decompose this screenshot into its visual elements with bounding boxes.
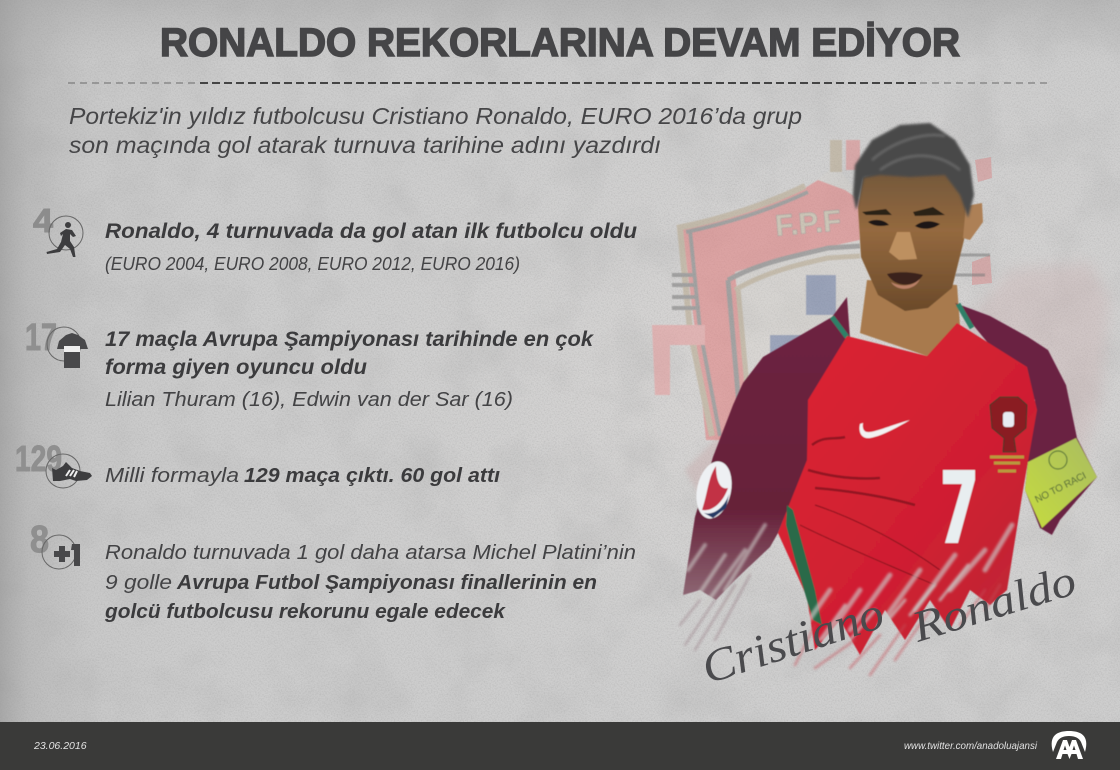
item 2 text: forma giyen oyuncu oldu — [105, 356, 367, 379]
icon: jersey — [47, 327, 88, 368]
faded federation crest — [652, 140, 990, 440]
item 1 text — [105, 220, 637, 274]
illustration: crest and player — [652, 123, 1110, 694]
jersey crest — [990, 397, 1027, 471]
player figure — [683, 165, 1097, 655]
item 4: Platini record — [30, 519, 636, 623]
signature — [695, 556, 1082, 694]
face — [858, 165, 967, 311]
item 1 text: Ronaldo, 4 turnuvada da gol atan ilk futbolcu oldu — [105, 220, 637, 243]
twitter url: www.twitter.com/anadoluajansi — [904, 740, 1038, 752]
ear — [963, 203, 983, 240]
footer bar — [0, 722, 1120, 770]
item 2: most appearances — [25, 317, 594, 411]
item 1: first to score in 4 tournaments — [33, 202, 637, 274]
red jersey front — [778, 323, 1037, 655]
hair — [853, 123, 974, 218]
right sleeve — [955, 303, 1097, 535]
item 3 text: Milli formayla — [105, 465, 239, 487]
nike logo — [859, 420, 910, 438]
icon: Anadolu Agency logo — [1052, 731, 1086, 759]
left sleeve — [683, 297, 850, 600]
intro text: Portekiz'in yıldız futbolcusu Cristiano Ronaldo, EURO 2016’da grup — [69, 103, 802, 129]
item 3 text — [105, 465, 500, 487]
neck — [860, 280, 960, 356]
number 7 — [943, 470, 975, 543]
brows, eyes, nose, mouth — [862, 207, 945, 289]
item 4 text: Ronaldo turnuvada 1 gol daha atarsa Michel Platini’nin — [105, 542, 636, 564]
captain armband: NO TO RACI — [1033, 470, 1088, 506]
date: 23.06.2016 — [33, 740, 87, 752]
icon: runner — [46, 216, 83, 257]
icon: football boot — [46, 454, 92, 488]
item 2 text: Lilian Thuram (16), Edwin van der Sar (16) — [105, 389, 513, 411]
paint streaks — [688, 500, 1080, 640]
title: RONALDO REKORLARINA DEVAM EDİYOR — [160, 21, 960, 65]
signature: Ronaldo — [906, 556, 1082, 652]
intro text: son maçında gol atarak turnuva tarihine adını yazdırdı — [69, 132, 661, 158]
icon: plus one — [42, 535, 80, 569]
item 4 text: golcü futbolcusu rekorunu egale edecek — [104, 601, 506, 623]
signature: Cristiano — [695, 587, 890, 694]
captain armband — [1025, 438, 1097, 528]
big number 4: 4 — [33, 202, 54, 239]
euro 2016 sleeve badge — [691, 458, 737, 522]
item 3 text: 129 maça çıktı. 60 gol attı — [244, 465, 500, 487]
item 2 text: 17 maçla Avrupa Şampiyonası tarihinde en çok — [105, 328, 594, 351]
jersey folds — [800, 437, 940, 585]
item 4 text — [104, 542, 636, 623]
background splatter — [685, 157, 1110, 505]
dashed divider — [68, 82, 1050, 84]
item 1 text: (EURO 2004, EURO 2008, EURO 2012, EURO 2016) — [105, 254, 520, 274]
big number 8: 8 — [30, 519, 49, 561]
item 4 text: Avrupa Futbol Şampiyonası finallerinin en — [176, 572, 597, 594]
big number 17: 17 — [25, 317, 57, 359]
item 2 text — [105, 328, 594, 411]
faded federation crest: F.P.F — [774, 204, 842, 243]
big number 129: 129 — [15, 438, 62, 479]
item 4 text: 9 golle — [105, 572, 172, 594]
item 3: caps and goals — [15, 438, 500, 488]
intro text — [69, 103, 802, 158]
collar trim — [832, 304, 972, 337]
side stripe — [786, 505, 822, 625]
